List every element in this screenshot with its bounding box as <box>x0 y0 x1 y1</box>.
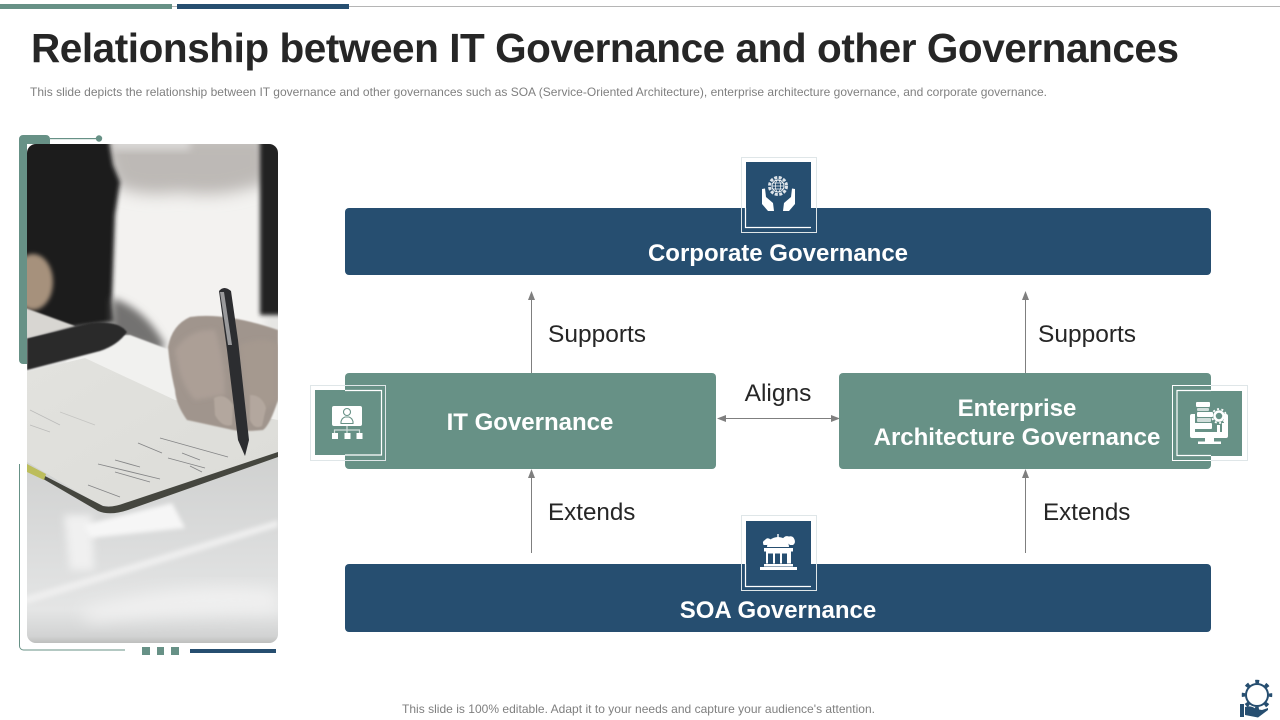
photo phone <box>27 322 127 370</box>
footer note: This slide is 100% editable. Adapt it to your needs and capture your audience's attention. <box>402 702 875 716</box>
photo handwriting <box>30 410 228 497</box>
photo pen <box>219 288 249 456</box>
panel: IT Governance <box>345 373 716 469</box>
arrow: Enterprise Architecture supports Corporate <box>1022 291 1029 373</box>
arrow: SOA extends IT Governance <box>528 469 535 553</box>
photo table and reflections <box>27 457 278 643</box>
photo desk behind notebook <box>66 334 278 420</box>
icon: gear on hand logo <box>1240 682 1270 718</box>
panel: Corporate Governance <box>345 208 1211 275</box>
icon: server stack monitor with gear <box>1172 386 1248 460</box>
arrow: aligns double-headed <box>717 415 840 422</box>
panel: IT Governance: IT Governance <box>447 409 613 436</box>
arrow: IT Governance supports Corporate <box>528 291 535 373</box>
title: Relationship between IT Governance and other Governances <box>31 25 1179 71</box>
arrow: SOA extends Enterprise Architecture <box>1022 469 1029 553</box>
top accent bars <box>0 4 1280 9</box>
photo dark figure <box>27 144 124 335</box>
icon: hands holding globe gear <box>742 158 816 232</box>
photo hand <box>168 316 278 431</box>
photo frame decoration <box>19 135 276 655</box>
label: Extends left: Extends <box>548 499 635 526</box>
photo notebook <box>27 358 278 506</box>
panel: Enterprise Architecture Governance: Architecture Governance <box>874 424 1160 451</box>
photo background window <box>113 190 264 348</box>
panel: Enterprise Architecture Governance: Enterprise <box>958 395 1076 422</box>
icon: government building dome <box>742 516 816 590</box>
label: Extends right: Extends <box>1043 499 1130 526</box>
label: Aligns: Aligns <box>745 380 811 407</box>
panel: SOA Governance: SOA Governance <box>680 597 876 624</box>
panel: SOA Governance <box>345 564 1211 632</box>
panel: Enterprise Architecture Governance <box>839 373 1211 469</box>
icon: person on screen with org chart <box>310 386 386 460</box>
panel: Corporate Governance: Corporate Governance <box>648 240 908 267</box>
label: Supports left: Supports <box>548 321 646 348</box>
label: Supports right: Supports <box>1038 321 1136 348</box>
subtitle description: This slide depicts the relationship between IT governance and other governances such as SOA (Service-Oriented Architecture), enterprise architecture governance, and corporate governance. <box>30 85 1047 99</box>
photo: hand writing in notebook <box>27 144 278 643</box>
